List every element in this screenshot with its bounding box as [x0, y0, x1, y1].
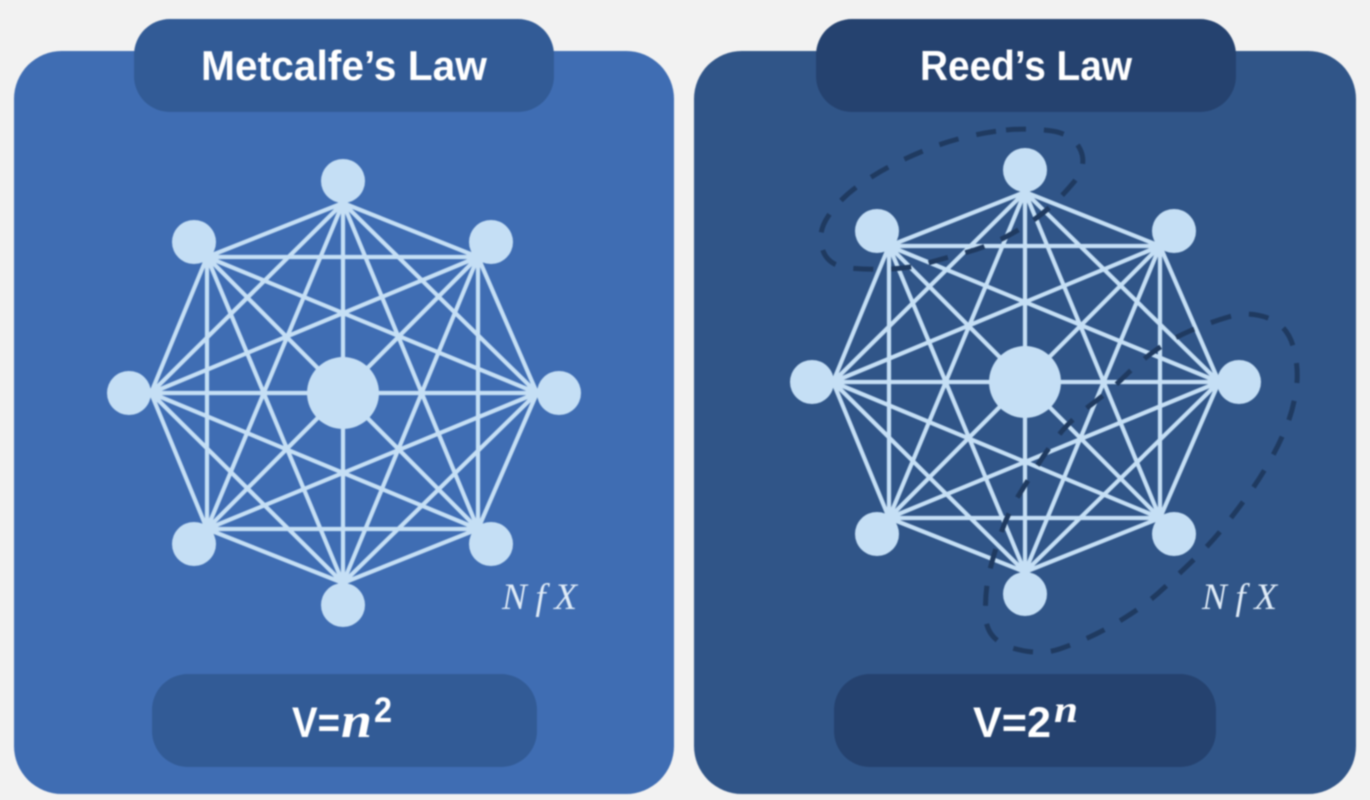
formula: V=n squared: n	[341, 692, 372, 748]
network nodes: Metcalfe	[107, 159, 581, 627]
watermark: NfX left: NfX	[501, 577, 578, 618]
formula: V=n squared	[152, 674, 537, 767]
formula: V=2 to the n: n	[1054, 689, 1078, 731]
panel background: Metcalfe	[14, 51, 674, 794]
formula: V=n squared: V=	[292, 699, 340, 747]
heading: Metcalfe's Law	[134, 19, 554, 112]
formula: V=n squared: 2	[374, 691, 392, 730]
panel: Metcalfe's Law	[14, 19, 674, 794]
formula: V=2 to the n	[834, 674, 1216, 767]
network edges: Reed	[833, 192, 1219, 572]
panel: Reed's Law	[694, 19, 1356, 794]
network diagram: Reed	[790, 148, 1261, 616]
network edges: Metcalfe	[151, 203, 537, 583]
formula: V=2 to the n: V=2	[973, 699, 1051, 747]
watermark: NfX right: NfX	[1201, 577, 1278, 618]
dashed cluster outline: top group	[821, 129, 1083, 269]
heading: Metcalfe's Law: Metcalfe’s Law	[201, 42, 487, 89]
heading: Reed's Law	[816, 19, 1236, 112]
panel background: Reed	[694, 51, 1356, 794]
network nodes: Reed	[790, 148, 1261, 616]
dashed cluster outline: lower right group	[985, 314, 1297, 652]
heading: Reed's Law: Reed’s Law	[920, 42, 1132, 89]
network diagram: Metcalfe	[107, 159, 581, 627]
